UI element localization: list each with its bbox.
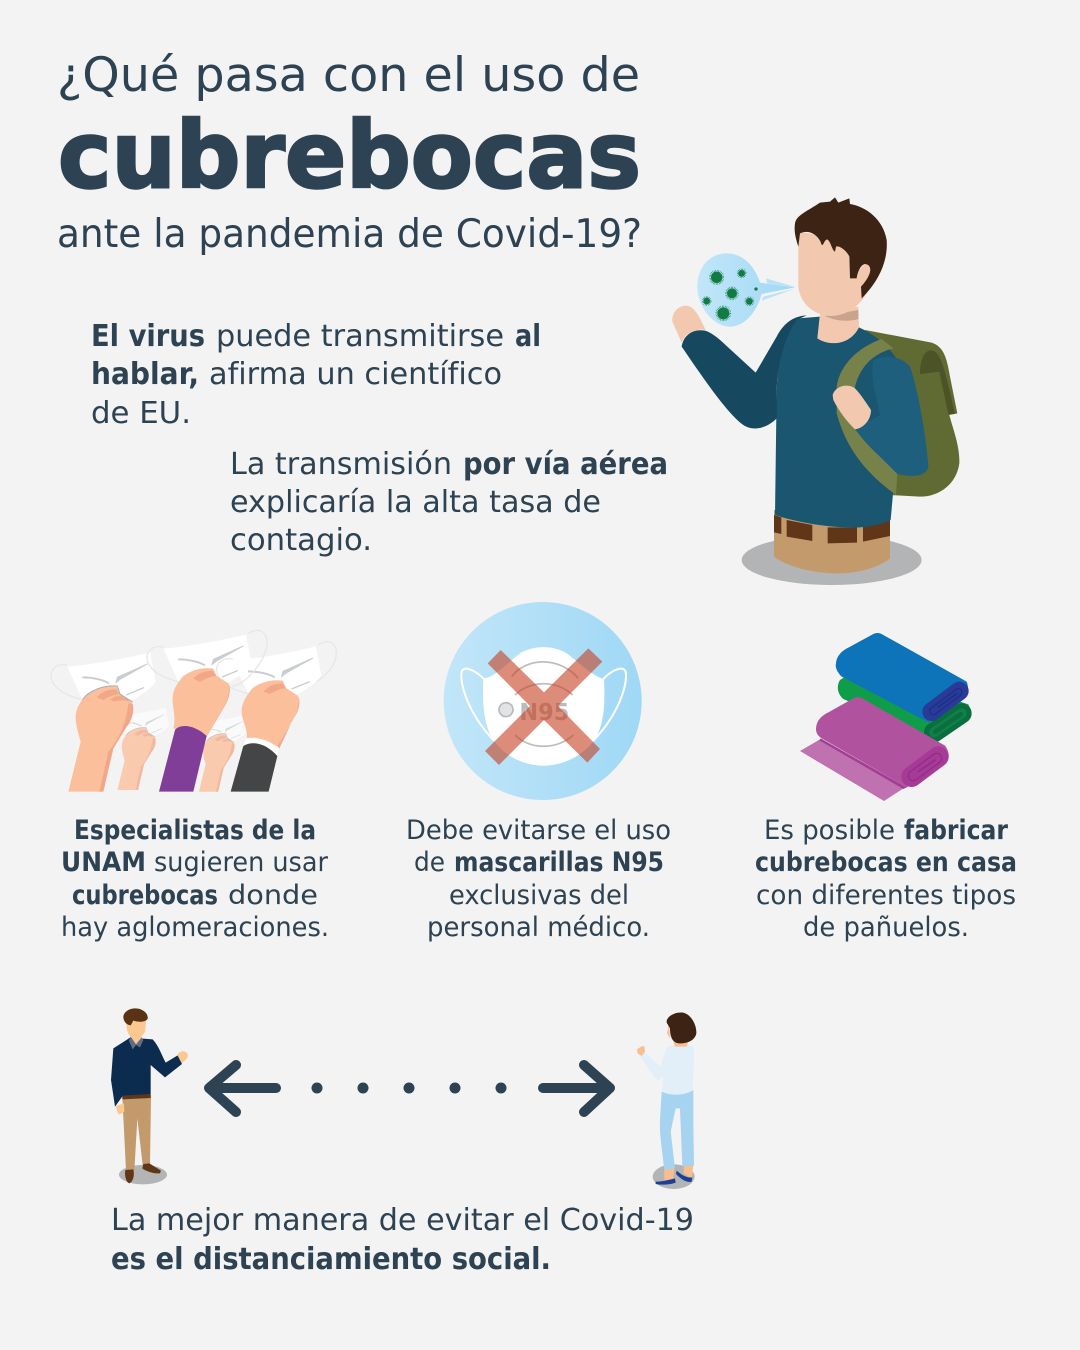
main fist	[68, 686, 133, 792]
icon: N95 respirator crossed out	[444, 602, 642, 800]
sleeve	[855, 357, 928, 476]
raised arm	[682, 315, 807, 428]
text block: transmisión por vía aérea: por vía aérea	[463, 447, 668, 482]
small fists	[117, 728, 156, 790]
caption: especialistas UNAM: hay aglomeraciones.	[61, 912, 329, 943]
purple sheet	[800, 739, 905, 801]
trousers	[660, 1090, 694, 1170]
raised hand	[672, 306, 706, 343]
fist with purple sleeve	[159, 668, 230, 792]
illustration: man with backpack speaking virus particles	[672, 197, 959, 585]
small back masks	[107, 708, 169, 738]
blue fabric	[836, 633, 968, 722]
belt	[122, 1094, 151, 1099]
backpack flap	[920, 350, 955, 414]
text block: transmisión al hablar	[91, 319, 541, 431]
skin legs	[664, 1165, 693, 1181]
masks	[51, 652, 156, 703]
caption: fabricar cubrebocas en casa: de pañuelos.	[803, 912, 969, 943]
caption: fabricar cubrebocas en casa: con diferentes tipos	[756, 880, 1016, 911]
trousers	[122, 1095, 151, 1171]
icon: raised fists holding face masks	[51, 630, 336, 792]
shoes	[125, 1163, 161, 1183]
text block: transmisión al hablar: puede transmitirse	[216, 319, 504, 354]
text block: distanciamiento social: La mejor manera de evitar el Covid-19	[111, 1203, 694, 1238]
backpack strap	[837, 339, 897, 495]
caption: especialistas UNAM	[61, 815, 329, 943]
caption: fabricar cubrebocas en casa: Es posible	[764, 815, 895, 846]
floor shadow	[742, 535, 922, 585]
respirator body	[483, 647, 604, 766]
title: ante la pandemia de Covid-19?	[57, 212, 642, 257]
red cross	[485, 648, 602, 765]
text block: distanciamiento social: es el distanciamiento social.	[111, 1242, 551, 1277]
text block: transmisión por vía aérea: La transmisión	[230, 447, 452, 482]
caption: especialistas UNAM: UNAM	[61, 847, 146, 878]
ear loops	[461, 669, 626, 741]
caption: especialistas UNAM: sugieren usar	[154, 847, 328, 878]
neck and face	[126, 1020, 146, 1038]
distance dots	[312, 1082, 506, 1094]
text block: transmisión al hablar: El virus	[91, 319, 205, 354]
face edge	[667, 1023, 670, 1038]
hair	[123, 1008, 148, 1025]
shirt	[639, 1044, 694, 1095]
caption: mascarillas N95: exclusivas del	[449, 880, 629, 911]
neck	[817, 307, 859, 343]
caption: mascarillas N95: personal médico.	[427, 912, 650, 943]
arrow: right	[543, 1065, 610, 1112]
caption: especialistas UNAM: Especialistas de la	[74, 815, 316, 846]
belt	[774, 515, 890, 543]
title	[57, 48, 642, 257]
text block: transmisión por vía aérea	[230, 447, 668, 558]
shoes	[656, 1171, 692, 1185]
hand on strap	[833, 386, 871, 429]
caption: mascarillas N95: mascarillas N95	[454, 847, 664, 878]
hair	[795, 197, 887, 298]
text block: transmisión al hablar: de EU.	[91, 396, 191, 431]
green fabric	[838, 668, 971, 741]
text block: transmisión al hablar: afirma un científico	[209, 357, 502, 392]
illustration: woman standing	[637, 1012, 696, 1189]
caption: fabricar cubrebocas en casa: fabricar	[904, 815, 1008, 846]
title: ¿Qué pasa con el uso de	[57, 48, 640, 103]
caption: especialistas UNAM: donde	[228, 880, 318, 911]
left hand	[116, 1103, 124, 1115]
speech bubble with virus	[697, 253, 797, 327]
sweater	[111, 1038, 182, 1107]
caption: especialistas UNAM: cubrebocas	[72, 880, 218, 911]
icon: N95 respirator crossed out: N95	[519, 698, 569, 726]
caption: mascarillas N95	[406, 815, 671, 943]
raised hand	[177, 1051, 188, 1063]
caption: fabricar cubrebocas en casa: cubrebocas en casa	[755, 847, 1017, 878]
illustration: man standing	[111, 1008, 188, 1184]
text block: distanciamiento social	[111, 1203, 694, 1277]
text block: transmisión por vía aérea: explicaría la alta tasa de	[230, 485, 601, 520]
pants	[774, 510, 890, 573]
caption: fabricar cubrebocas en casa	[755, 815, 1017, 943]
icon: folded fabric rolls	[800, 633, 971, 801]
face	[798, 232, 872, 316]
fist with suit sleeve	[231, 680, 299, 792]
purple fabric	[816, 697, 949, 787]
backpack	[860, 330, 959, 497]
text block: transmisión al hablar: al	[515, 319, 541, 354]
text block: transmisión al hablar: hablar,	[91, 357, 199, 392]
torso	[775, 317, 908, 527]
hand	[637, 1046, 645, 1056]
caption: mascarillas N95: de	[414, 847, 445, 878]
arrow: left	[209, 1065, 276, 1112]
hair	[667, 1012, 696, 1043]
caption: mascarillas N95: Debe evitarse el uso	[406, 815, 671, 846]
text block: transmisión por vía aérea: contagio.	[230, 523, 372, 558]
title: cubrebocas	[58, 102, 641, 209]
collar	[129, 1037, 143, 1049]
